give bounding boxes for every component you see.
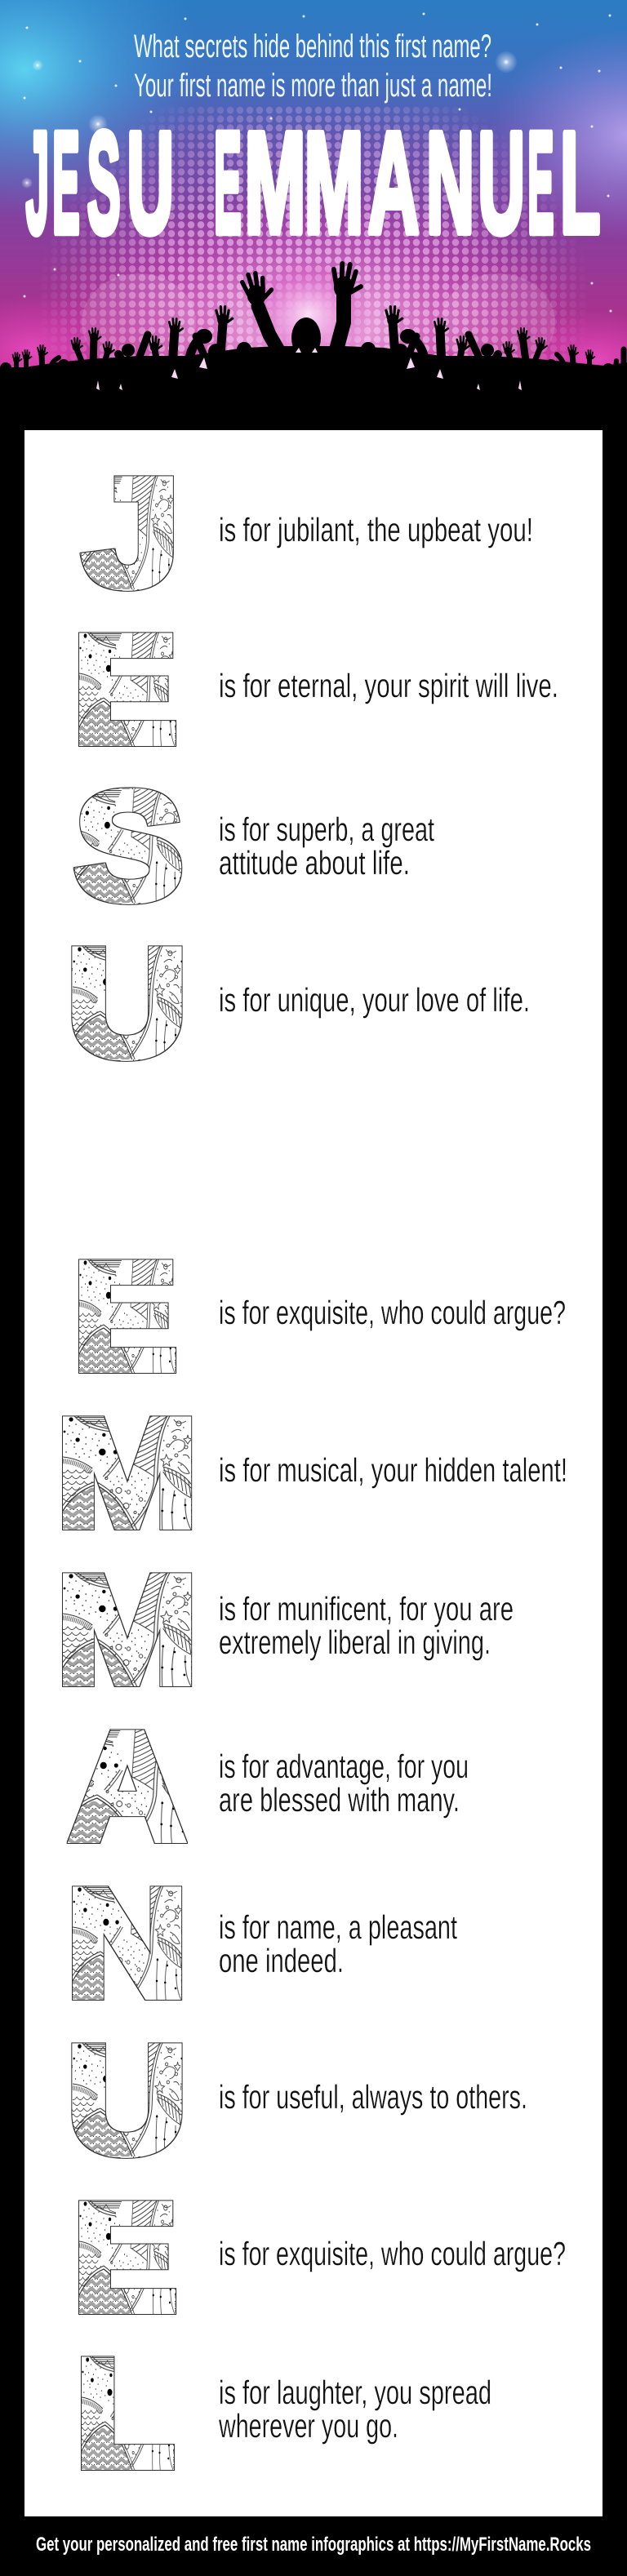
row: N bbox=[66, 1858, 457, 2028]
letter M: M bbox=[56, 1545, 198, 1716]
row: J bbox=[83, 447, 533, 618]
row: S bbox=[74, 762, 434, 932]
caption S bbox=[219, 811, 434, 882]
letter L: L bbox=[75, 2328, 175, 2498]
row: third E bbox=[73, 2172, 566, 2343]
caption A bbox=[219, 1748, 469, 1819]
caption S: attitude about life. bbox=[219, 844, 410, 882]
caption A: is for advantage, for you bbox=[219, 1748, 469, 1785]
title: L bbox=[560, 103, 600, 264]
title: M bbox=[244, 102, 306, 263]
caption S: is for superb, a great bbox=[219, 811, 434, 848]
letter U: U bbox=[67, 2014, 188, 2185]
letter J: J bbox=[83, 447, 180, 618]
row: L bbox=[75, 2328, 491, 2498]
caption L: is for laughter, you spread bbox=[219, 2374, 491, 2411]
letter N: N bbox=[66, 1858, 189, 2028]
caption N bbox=[219, 1908, 457, 1979]
row: A bbox=[69, 1701, 469, 1872]
caption L bbox=[218, 2374, 491, 2445]
letter E: E bbox=[73, 1231, 178, 1401]
row: second-name E bbox=[73, 1231, 566, 1401]
caption M bbox=[219, 1590, 514, 1661]
row: E bbox=[73, 604, 558, 775]
title bbox=[26, 102, 600, 264]
title: E bbox=[527, 103, 554, 264]
letter E: E bbox=[73, 2172, 178, 2343]
white panel lower bbox=[24, 884, 603, 2516]
letter M: M bbox=[56, 1388, 198, 1559]
caption N: one indeed. bbox=[219, 1942, 344, 1979]
caption M: extremely liberal in giving. bbox=[219, 1623, 491, 1661]
caption A: are blessed with many. bbox=[219, 1781, 460, 1819]
letter E: E bbox=[73, 604, 178, 775]
title: N bbox=[426, 104, 474, 264]
title: S bbox=[87, 103, 121, 263]
caption L: wherever you go. bbox=[218, 2407, 398, 2445]
row: U bbox=[67, 917, 530, 1088]
header background: stage lights bbox=[0, 0, 627, 367]
white panel bbox=[24, 430, 603, 884]
title: E bbox=[214, 104, 242, 264]
title: M bbox=[305, 103, 363, 263]
crowd silhouette bbox=[0, 263, 627, 433]
row: second U bbox=[67, 2014, 527, 2185]
title: U bbox=[127, 102, 174, 263]
intro text bbox=[134, 29, 492, 104]
letter A: A bbox=[69, 1701, 185, 1872]
row: M bbox=[56, 1388, 567, 1559]
letter S: S bbox=[74, 762, 184, 932]
row: second M bbox=[56, 1545, 514, 1716]
title: J bbox=[26, 104, 49, 264]
caption M: is for munificent, for you are bbox=[219, 1590, 514, 1628]
caption N: is for name, a pleasant bbox=[219, 1908, 457, 1946]
letter U: U bbox=[67, 917, 188, 1088]
title: E bbox=[52, 104, 80, 264]
title: U bbox=[478, 102, 525, 263]
title: A bbox=[367, 103, 420, 264]
